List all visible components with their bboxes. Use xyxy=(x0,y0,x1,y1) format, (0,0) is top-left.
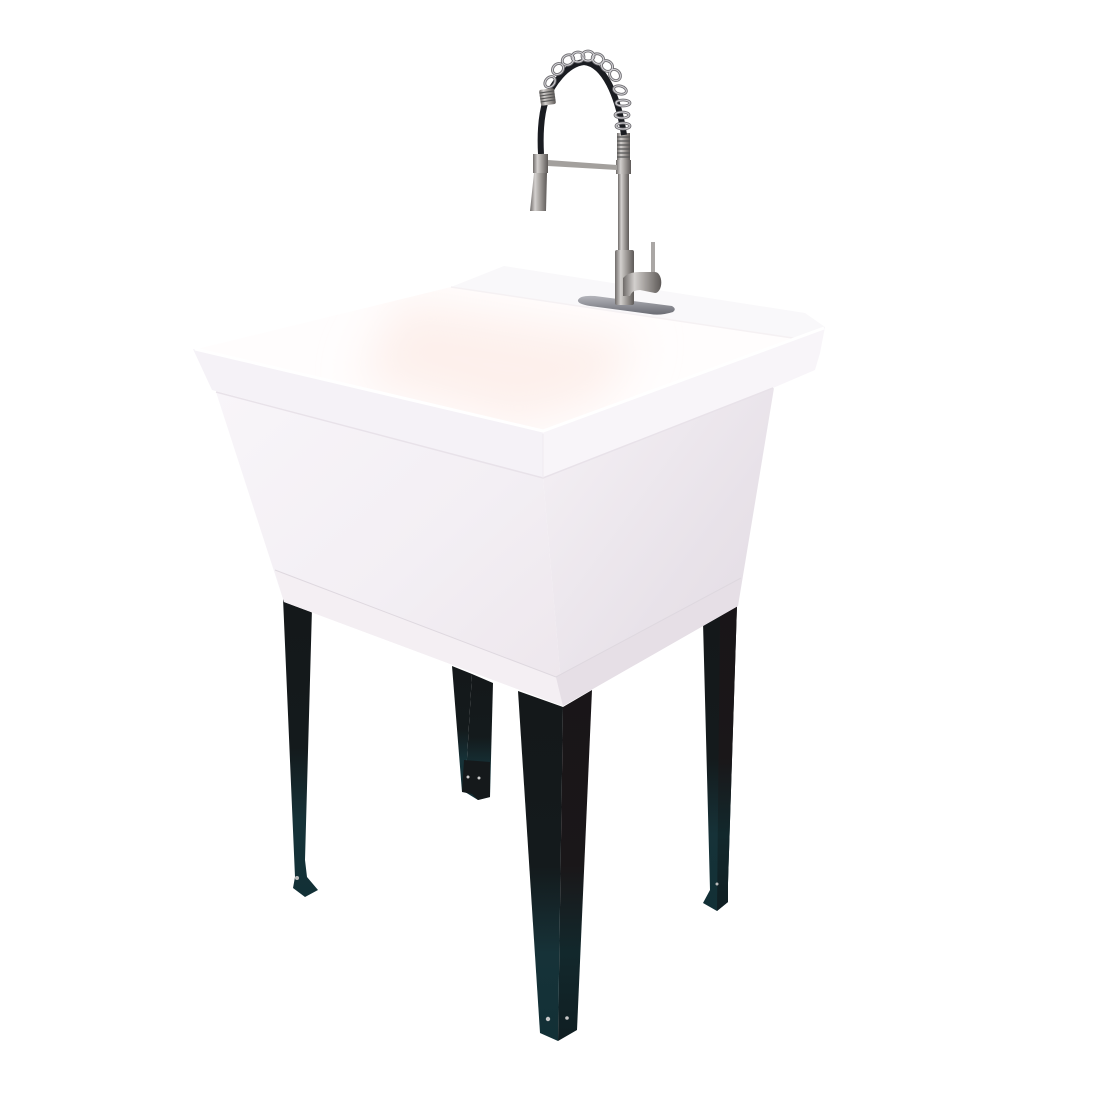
right leg xyxy=(703,605,737,911)
connector bar xyxy=(548,160,617,170)
sink basin xyxy=(193,266,825,706)
spray head xyxy=(530,154,548,211)
handle body xyxy=(623,272,661,296)
rim: top highlight xyxy=(195,328,824,431)
left leg xyxy=(283,598,318,897)
black hose and arch xyxy=(541,62,624,154)
front leg xyxy=(518,690,592,1041)
body: front panel xyxy=(216,392,563,706)
basin interior xyxy=(197,287,806,430)
spring coil highlights xyxy=(543,51,630,129)
body: bottom band xyxy=(275,570,563,706)
spring collar xyxy=(617,133,630,160)
rim: back ledge xyxy=(451,266,825,340)
illustration: utility sink on legs with faucet xyxy=(193,50,824,1041)
lever xyxy=(651,242,655,272)
spring coils xyxy=(543,51,630,129)
base column xyxy=(615,250,634,305)
faucet xyxy=(530,51,675,315)
back leg xyxy=(452,666,493,800)
stem xyxy=(618,160,629,250)
body: right panel xyxy=(543,388,774,706)
rim: front-right face xyxy=(543,327,825,478)
interior shading wash xyxy=(375,306,620,420)
rim: front-left face xyxy=(193,349,543,478)
hose collar xyxy=(539,88,556,106)
deck plate xyxy=(578,296,675,315)
